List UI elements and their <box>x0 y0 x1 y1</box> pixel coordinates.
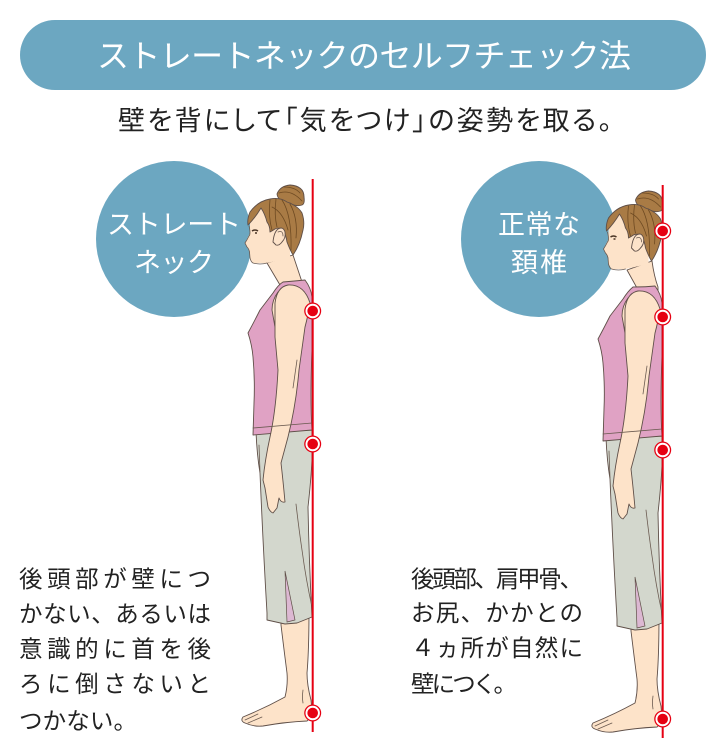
text: normal posture explanation: 壁につく。 <box>411 671 517 697</box>
badge: normal cervical spine: 頚椎 <box>511 248 567 278</box>
badge: normal cervical spine <box>461 161 617 317</box>
figure: straight neck posture <box>242 185 312 726</box>
badge: straight neck: ストレート <box>107 210 241 240</box>
title banner <box>20 20 706 90</box>
text: straight neck explanation: ろに倒さないと <box>19 671 211 697</box>
wall line left <box>312 179 314 732</box>
text: straight neck explanation: かない、あるいは <box>19 601 211 627</box>
text: normal posture explanation: お尻、かかとの <box>411 600 583 626</box>
text: straight neck explanation: 後頭部が壁につ <box>19 566 211 592</box>
text: normal posture explanation: ４ヵ所が自然に <box>411 635 583 661</box>
figure: normal posture <box>592 191 663 732</box>
text: straight neck explanation: つかない。 <box>19 708 137 734</box>
text: straight neck explanation <box>19 566 211 734</box>
contact markers right <box>654 222 671 728</box>
text: straight neck explanation: 意識的に首を後 <box>19 636 211 662</box>
text: normal posture explanation <box>411 566 583 697</box>
text: normal posture explanation: 後頭部、肩甲骨、 <box>411 566 583 592</box>
subtitle: 壁を背にして「気をつけ」の姿勢を取る。 <box>118 106 612 136</box>
title banner: ストレートネックのセルフチェック法 <box>97 38 631 74</box>
badge: straight neck <box>96 161 252 317</box>
wall line right <box>662 185 664 738</box>
badge: normal cervical spine: 正常な <box>498 210 580 240</box>
contact markers left <box>304 302 321 722</box>
badge: straight neck: ネック <box>134 248 214 278</box>
